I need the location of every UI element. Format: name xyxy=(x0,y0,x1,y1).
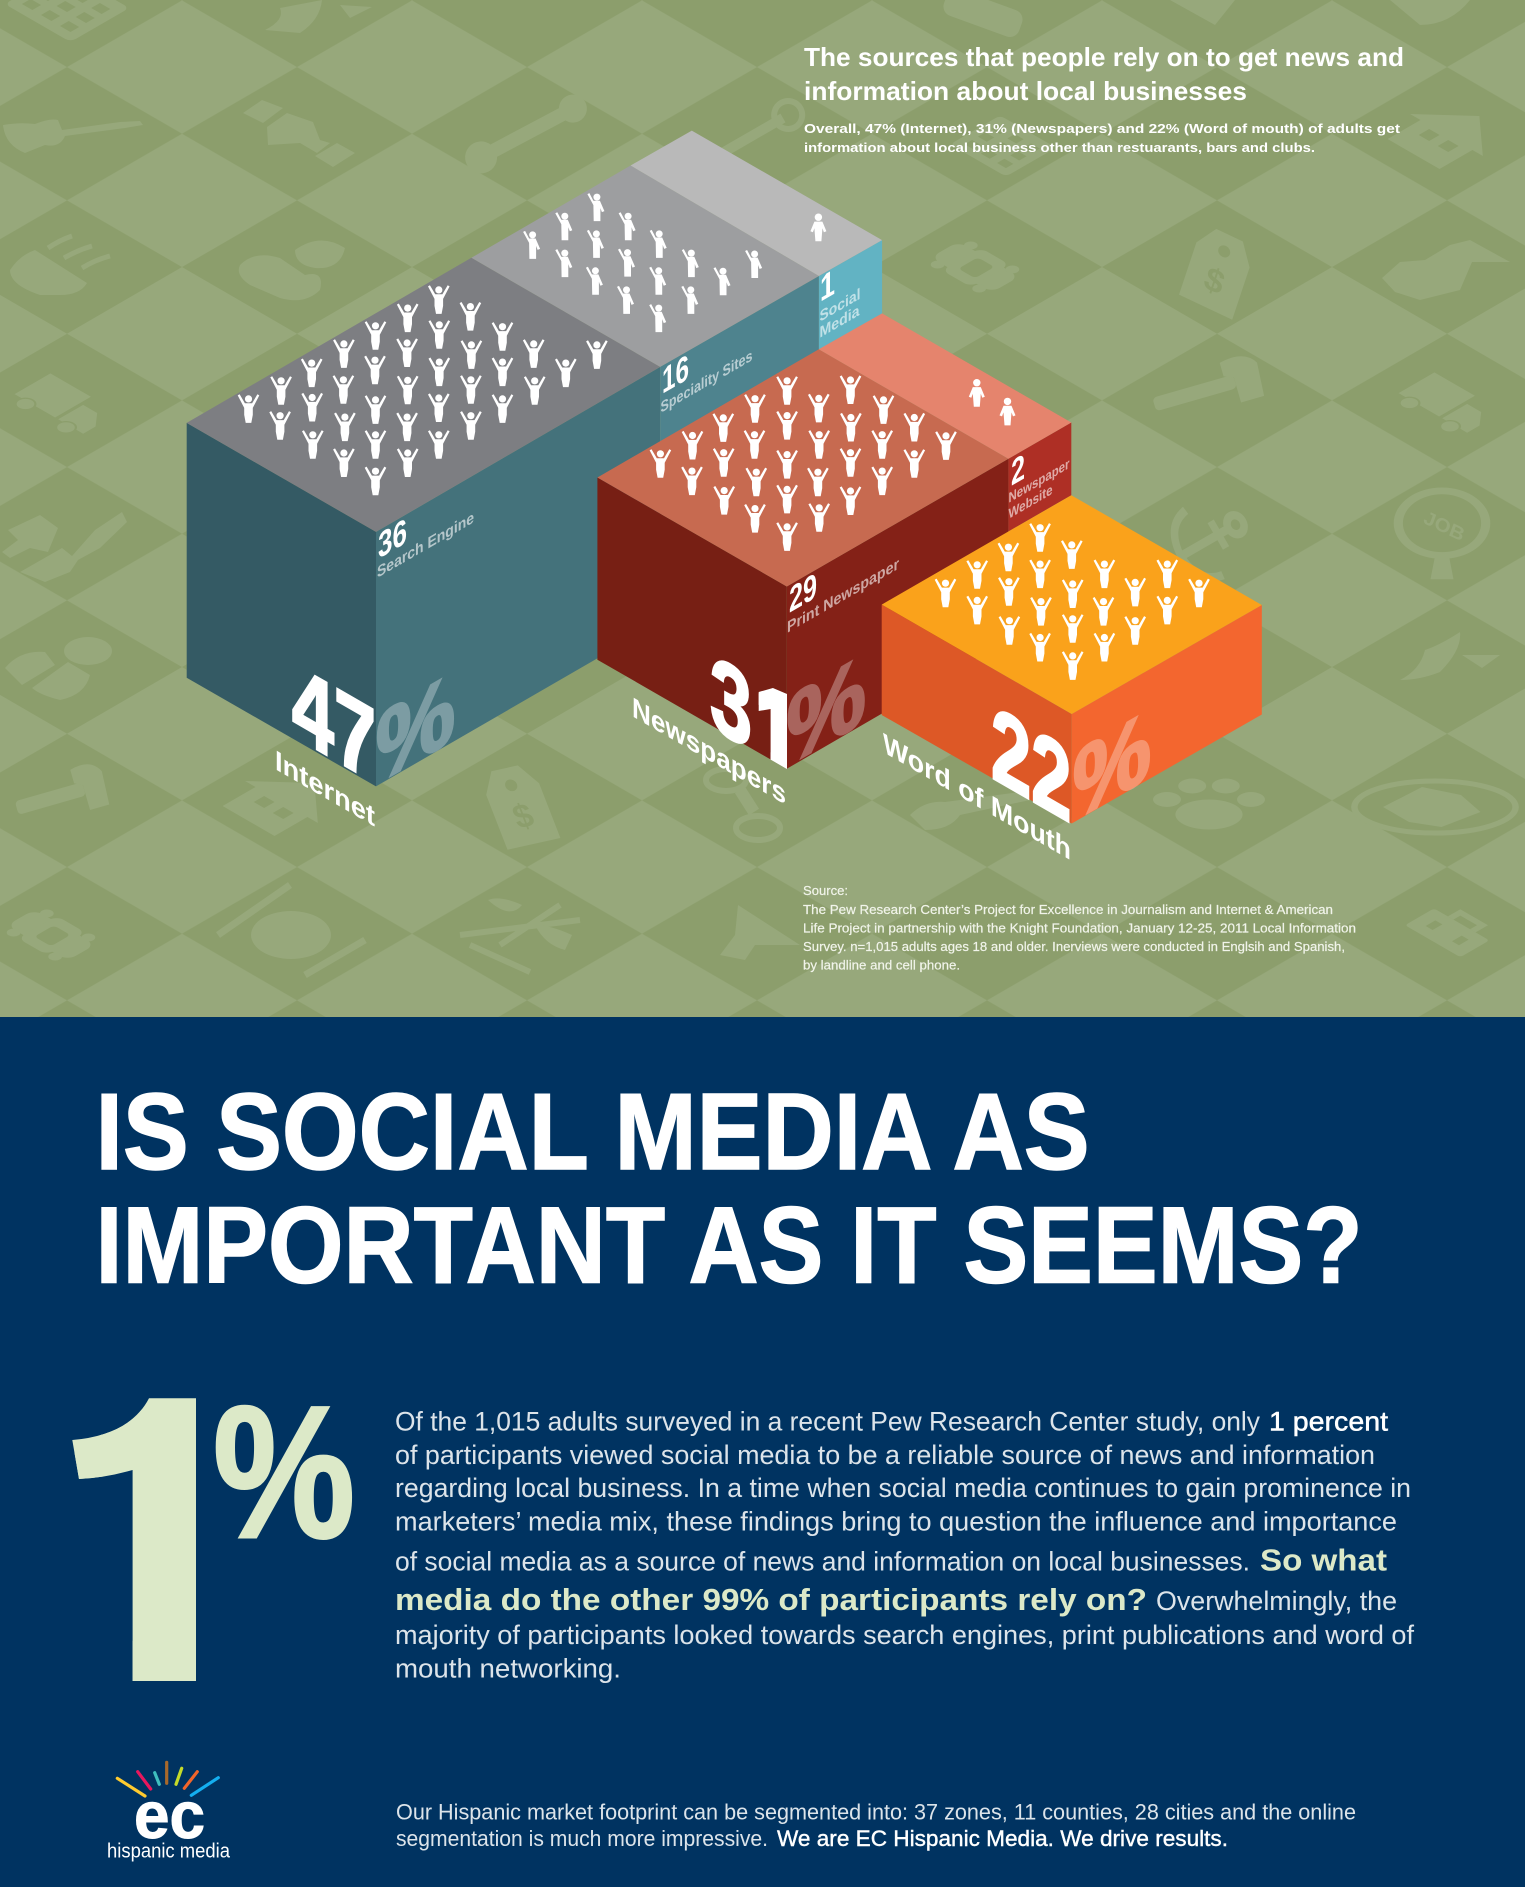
isometric block: Newspapers 31%: 2 xyxy=(1011,446,1025,494)
isometric block: Newspapers 31%: Website xyxy=(1008,482,1052,523)
isometric block: Newspapers 31%: 3 xyxy=(710,632,752,773)
big stat: 1%: % xyxy=(213,1367,355,1577)
source note: Source: xyxy=(803,883,848,898)
isometric block: Internet 47%: Search Engine xyxy=(377,507,474,582)
isometric block: Newspapers 31%: 29 xyxy=(789,565,817,621)
body paragraph: mouth networking. xyxy=(395,1653,621,1683)
source note: by landline and cell phone. xyxy=(803,958,960,972)
isometric block: Internet 47%: 36 xyxy=(378,511,407,567)
isometric block: Internet 47%: 1 xyxy=(820,262,835,310)
main title: IS SOCIAL MEDIA AS xyxy=(96,1071,1090,1193)
intro text: information about local business other than restuarants, bars and clubs. xyxy=(804,140,1315,155)
category label: Internet: Internet xyxy=(275,745,375,833)
big stat: 1%: 1 xyxy=(45,1323,265,1765)
body paragraph: of participants viewed social media to be a reliable source of news and information xyxy=(395,1440,1375,1470)
body paragraph: marketers’ media mix, these findings bring to question the influence and importance xyxy=(395,1507,1397,1537)
big stat: 1% xyxy=(72,1398,352,1681)
background icons: JOB xyxy=(1421,508,1467,546)
logo: EC Hispanic Media: hispanic media xyxy=(107,1841,231,1863)
isometric block: Word of Mouth 22%: % xyxy=(1073,689,1151,842)
isometric block: Newspapers 31% xyxy=(597,313,1071,807)
body paragraph xyxy=(395,1407,1414,1683)
isometric block: Internet 47%: Media xyxy=(820,301,860,342)
body paragraph: 1 percent xyxy=(1269,1407,1389,1437)
logo: EC Hispanic Media xyxy=(107,1762,231,1863)
isometric block: Word of Mouth 22%: 22 xyxy=(991,683,1072,847)
people: 22 word of mouth xyxy=(935,523,1210,680)
body paragraph: majority of participants looked towards search engines, print publications and word of xyxy=(395,1620,1414,1650)
people: 16 speciality sites xyxy=(523,193,762,332)
footer text: Our Hispanic market footprint can be segmented into: 37 zones, 11 counties, 28 cities and the online xyxy=(396,1799,1356,1824)
footer text: segmentation is much more impressive. xyxy=(396,1826,768,1851)
body paragraph: So what xyxy=(1260,1543,1387,1578)
isometric block: Newspapers 31%: Print Newspaper xyxy=(787,553,899,637)
person: 1 social media xyxy=(810,214,826,241)
source note xyxy=(803,883,1356,972)
navy panel xyxy=(0,1017,1525,1887)
isometric block: Internet 47%: 16 xyxy=(662,347,689,402)
heading: sources people rely on: The sources that people rely on to get news and xyxy=(804,42,1404,72)
footer text: We are EC Hispanic Media. We drive results. xyxy=(777,1826,1228,1851)
heading: sources people rely on xyxy=(804,42,1404,106)
isometric block: Internet 47%: % xyxy=(376,651,455,805)
source note: Survey. n=1,015 adults ages 18 and older. Inerviews were conducted in Englsih and Spanish, xyxy=(803,939,1345,954)
category label: Newspapers: Newspapers xyxy=(632,692,786,811)
footer text xyxy=(396,1799,1356,1851)
isometric block: Word of Mouth 22% xyxy=(882,495,1262,847)
isometric block: Newspapers 31%: % xyxy=(787,633,866,787)
people: 36 search engine xyxy=(238,285,608,495)
isometric block: Newspapers 31%: Newspaper xyxy=(1008,456,1070,507)
body paragraph: Of the 1,015 adults surveyed in a recent Pew Research Center study, only xyxy=(395,1407,1260,1437)
isometric block: Internet 47%: 47 xyxy=(292,641,376,807)
source note: Life Project in partnership with the Knight Foundation, January 12-25, 2011 Local Information xyxy=(803,920,1356,936)
body paragraph: of social media as a source of news and information on local businesses. xyxy=(395,1547,1250,1577)
isometric block: Internet 47%: Social xyxy=(820,284,860,326)
isometric block: Internet 47% xyxy=(187,131,882,807)
background icons xyxy=(0,0,1516,975)
main title xyxy=(96,1071,1362,1307)
intro text: Overall, 47% (Internet), 31% (Newspapers) and 22% (Word of mouth) of adults get xyxy=(804,121,1401,136)
logo: EC Hispanic Media: ec xyxy=(134,1778,205,1852)
heading: sources people rely on: information about local businesses xyxy=(804,76,1247,106)
intro text xyxy=(804,121,1401,155)
body paragraph: regarding local business. In a time when social media continues to gain prominence in xyxy=(395,1473,1411,1503)
green isometric floor background xyxy=(0,0,1525,1017)
isometric block: Newspapers 31%: 1 xyxy=(748,656,806,807)
body paragraph: media do the other 99% of participants rely on? xyxy=(395,1582,1147,1617)
category label: Word of Mouth: Word of Mouth xyxy=(883,728,1071,867)
main title: IMPORTANT AS IT SEEMS? xyxy=(96,1185,1362,1307)
people: 2 newspaper website xyxy=(969,379,1016,425)
people: 29 print newspaper xyxy=(650,375,957,551)
isometric block: Internet 47%: Speciality Sites xyxy=(660,346,752,417)
source note: The Pew Research Center’s Project for Excellence in Journalism and Internet & American xyxy=(803,902,1333,917)
body paragraph: Overwhelmingly, the xyxy=(1156,1586,1397,1616)
